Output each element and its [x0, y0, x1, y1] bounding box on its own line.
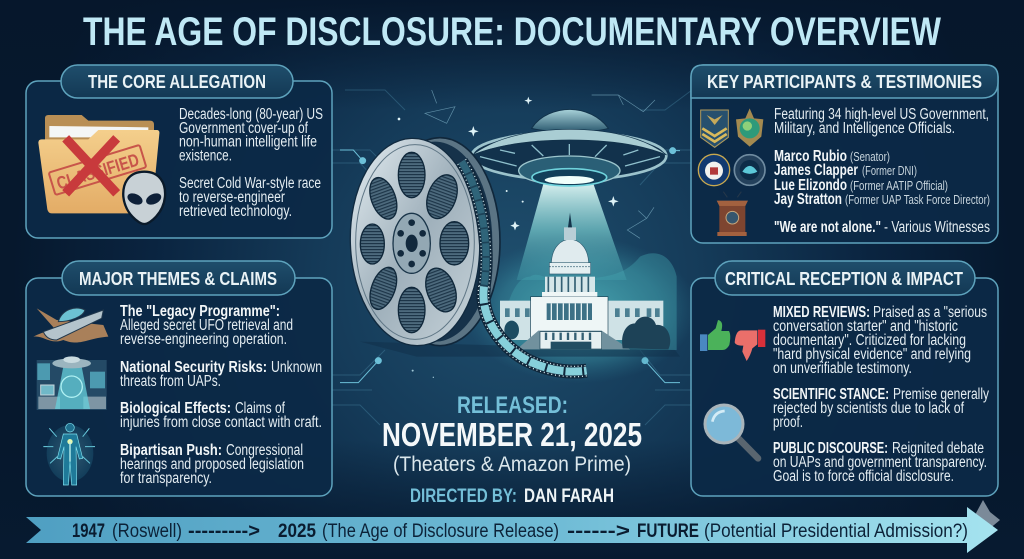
text: allegation: existence. — [179, 148, 232, 164]
timeline arrow: (Potential Presidential Admission?) — [704, 521, 968, 542]
film strip — [462, 162, 587, 372]
text: reception: Reignited debate — [892, 440, 984, 457]
text: reception: MIXED REVIEWS: — [773, 304, 870, 321]
text: themes: Claims of — [235, 400, 286, 417]
heading: core allegation — [61, 65, 293, 98]
panel: critical reception and impact — [691, 261, 998, 496]
release information — [382, 392, 642, 507]
heading: key participants — [691, 65, 998, 98]
text: allegation: Decades-long (80-year) US — [179, 106, 323, 123]
text: themes: threats from UAPs. — [120, 373, 221, 390]
text: allegation — [179, 106, 323, 220]
bushes — [622, 317, 670, 349]
text: participants: (Former AATIP Official) — [850, 179, 948, 193]
release information: NOVEMBER 21, 2025 — [382, 416, 642, 453]
release information: RELEASED: — [457, 392, 568, 419]
heading: key participants: KEY PARTICIPANTS & TESTIMONIES — [707, 71, 982, 92]
icon: glowing human body — [43, 423, 95, 485]
icon: classified folder: CLASSIFIED — [54, 150, 141, 194]
text: participants: Jay Stratton — [774, 191, 842, 208]
text: reception: Praised as a "serious — [873, 304, 987, 321]
stars and constellations — [398, 90, 655, 378]
text: reception: SCIENTIFIC STANCE: — [773, 386, 889, 403]
text: themes: National Security Risks: — [120, 359, 267, 376]
circuit nodes — [340, 148, 680, 383]
text: themes: Biological Effects: — [120, 400, 231, 417]
text: reception: proof. — [773, 414, 803, 431]
timeline arrow: (Roswell) — [112, 521, 182, 542]
text: themes: Alleged secret UFO retrieval and — [120, 317, 293, 334]
text: reception: documentary". Criticized for lacking — [773, 332, 966, 349]
text: allegation: retrieved technology. — [179, 203, 292, 220]
text: participants: Lue Elizondo — [774, 177, 847, 194]
panel: the core allegation — [26, 65, 332, 238]
heading: major themes — [62, 261, 295, 295]
text: participants: James Clapper — [774, 162, 858, 179]
text: participants: Military, and Intelligence Officials. — [774, 120, 955, 137]
text: themes: Congressional — [226, 442, 303, 459]
heading: critical reception — [715, 261, 975, 295]
heading: major themes: MAJOR THEMES & CLAIMS — [79, 268, 277, 289]
timeline arrow: (The Age of Disclosure Release) — [322, 521, 559, 542]
release information: (Theaters & Amazon Prime) — [393, 453, 631, 476]
text: reception: PUBLIC DISCOURSE: — [773, 440, 888, 457]
timeline arrow — [26, 500, 1000, 553]
ground — [360, 342, 680, 357]
text: allegation: Government cover-up of — [179, 120, 309, 137]
text: reception: Goal is to force official disclosure. — [773, 468, 954, 485]
panel: key participants and testimonies — [691, 65, 998, 243]
timeline arrow: ------> — [567, 521, 630, 542]
text: themes — [120, 303, 322, 487]
text: reception: on unverifiable testimony. — [773, 360, 912, 377]
icon: thumbs up and down — [700, 320, 765, 361]
text: participants: "We are not alone." — [774, 219, 881, 236]
text: reception: Premise generally — [893, 386, 989, 403]
text: participants: (Senator) — [850, 150, 890, 164]
timeline arrow: 2025 — [278, 521, 316, 542]
text: themes: injuries from close contact with craft. — [120, 414, 322, 431]
text: allegation: to reverse-engineer — [179, 189, 285, 206]
text: themes: for transparency. — [120, 470, 212, 487]
text: participants — [774, 106, 990, 236]
icon: security monitoring room — [37, 356, 107, 410]
text: reception — [773, 304, 989, 485]
text: themes: hearings and proposed legislation — [120, 456, 304, 473]
release information: DIRECTED BY: — [410, 486, 517, 507]
timeline arrow: ---------> — [188, 521, 260, 542]
film reel — [347, 136, 500, 348]
text: participants: - Various Witnesses — [884, 219, 990, 236]
text: participants: Marco Rubio — [774, 148, 847, 165]
timeline arrow: FUTURE — [637, 521, 699, 542]
text: themes: Unknown — [271, 359, 322, 376]
text: themes: reverse-engineering operation. — [120, 331, 287, 348]
panel: major themes and claims — [26, 261, 332, 496]
text: themes: Bipartisan Push: — [120, 442, 222, 459]
text: reception: rejected by scientists due to lack of — [773, 400, 965, 417]
UFO — [472, 109, 667, 186]
text: allegation: non-human intelligent life — [179, 134, 317, 150]
US Capitol — [500, 213, 663, 349]
icon: crashed UFO — [33, 308, 108, 343]
central illustration: film reel, UFO and Capitol — [340, 90, 697, 383]
timeline arrow: 1947 — [72, 521, 105, 542]
ground glow — [463, 237, 697, 383]
text: themes: The "Legacy Programme": — [120, 303, 280, 320]
text: participants: (Former DNI) — [862, 164, 917, 178]
text: allegation: Secret Cold War-style race — [179, 175, 321, 192]
heading: critical reception: CRITICAL RECEPTION & IMPACT — [725, 268, 964, 289]
icon: classified folder — [38, 115, 165, 224]
heading: core allegation: THE CORE ALLEGATION — [88, 71, 266, 92]
icons: government badges and podium — [698, 108, 765, 236]
text: reception: "hard physical evidence" and relying — [773, 346, 971, 363]
icon: alien head — [123, 172, 165, 224]
icon: magnifying glass — [705, 405, 758, 458]
release information: DAN FARAH — [524, 486, 614, 507]
text: reception: conversation starter" and "historic — [773, 318, 958, 335]
light beam — [517, 182, 627, 280]
